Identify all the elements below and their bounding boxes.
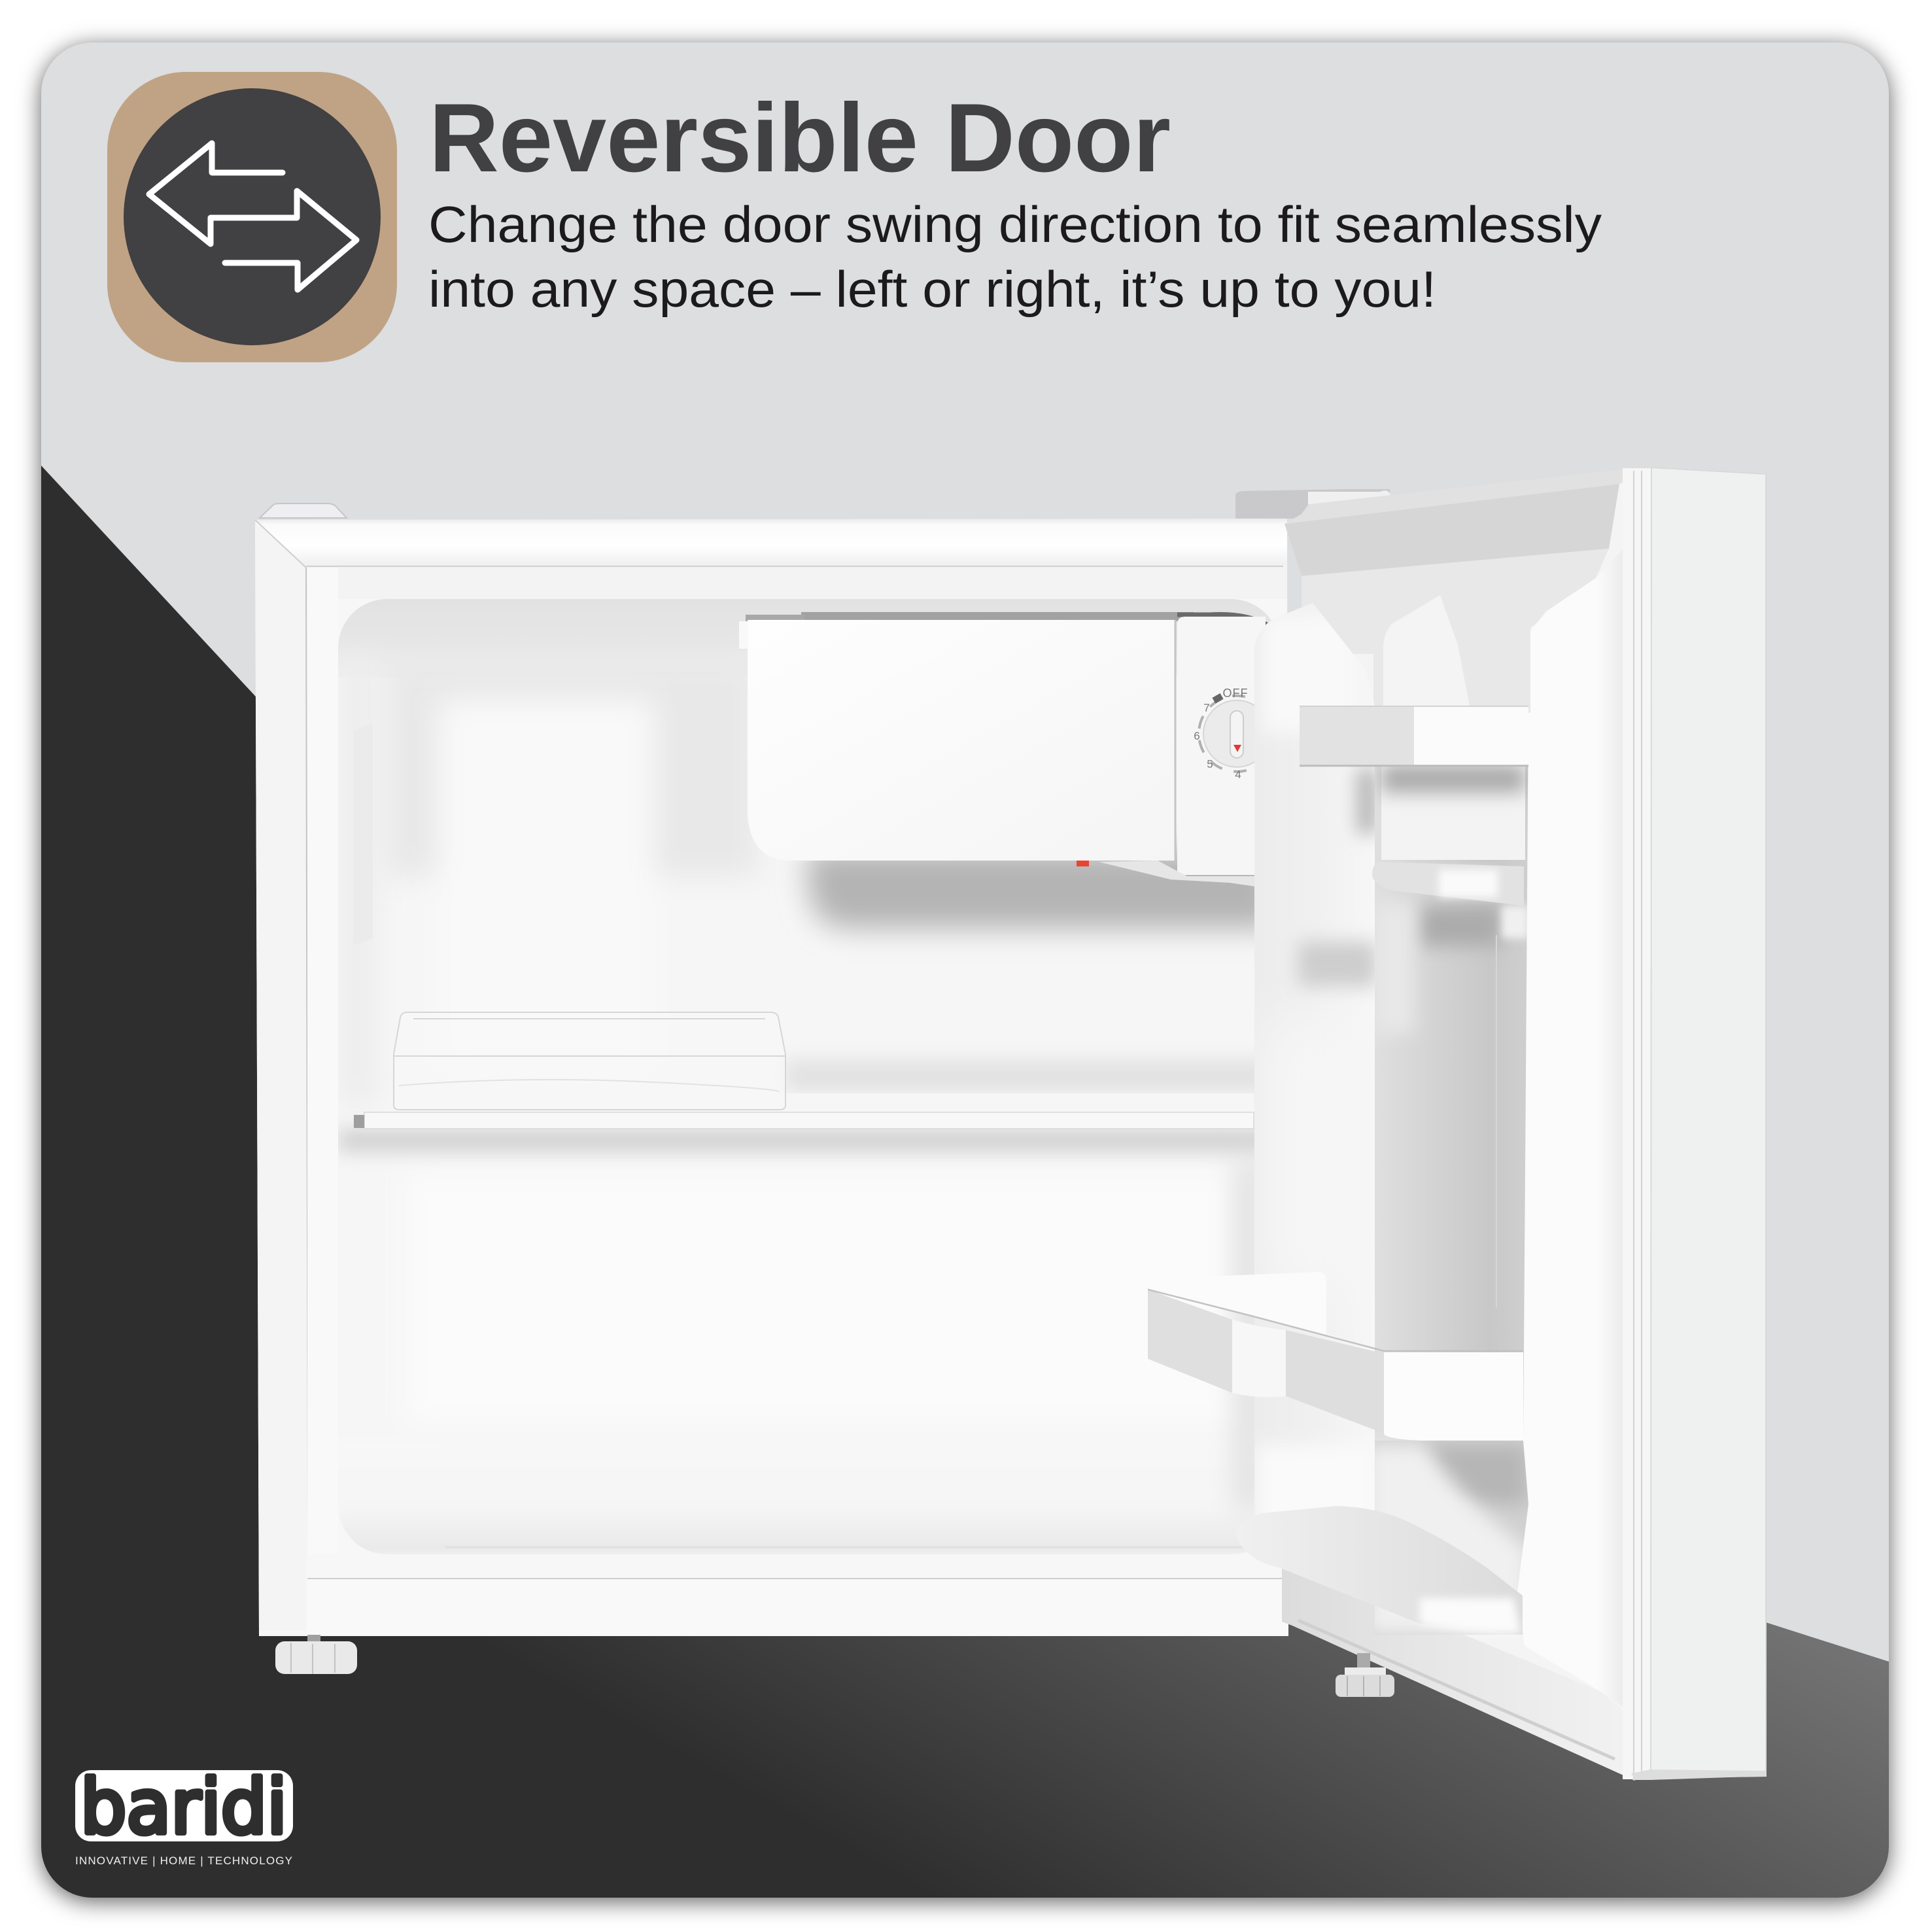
freezer shadow bbox=[808, 850, 1275, 929]
logo tagline: INNOVATIVE | HOME | TECHNOLOGY bbox=[75, 1854, 292, 1867]
door side shadow bbox=[1236, 1157, 1262, 1511]
wall label sticker bbox=[353, 723, 373, 945]
shelf shadow bbox=[338, 1129, 1280, 1152]
rear wall shading bbox=[338, 654, 1280, 1554]
recess seam bbox=[1496, 935, 1497, 1308]
control box bbox=[1099, 617, 1275, 889]
rear shelf lip bbox=[785, 1093, 1254, 1112]
door underside gasket bbox=[1282, 1568, 1635, 1781]
recess shadows bbox=[1367, 762, 1528, 1637]
left frame strip bbox=[255, 520, 338, 1630]
top frame band bbox=[255, 519, 1287, 599]
thermostat dial: OFF bbox=[1223, 687, 1248, 700]
door liner base bbox=[1254, 471, 1634, 1781]
fridge body bbox=[255, 489, 1392, 1636]
recess body bbox=[1375, 765, 1528, 1635]
freezer hinge bracket bbox=[746, 615, 804, 624]
indicator light bbox=[1077, 861, 1089, 866]
thermostat dial: 4 bbox=[1235, 768, 1241, 781]
title: Reversible Door bbox=[429, 83, 1171, 192]
middle lip bbox=[1372, 862, 1524, 906]
cavity ceiling bbox=[338, 599, 1271, 670]
door inner top wedge bbox=[1285, 484, 1619, 576]
fridge foot left bbox=[275, 1635, 357, 1674]
lower bottom sill bbox=[1235, 1506, 1523, 1633]
top right hinge bbox=[1235, 489, 1392, 519]
cabinet front bbox=[255, 519, 1288, 1636]
top left cap bbox=[260, 504, 347, 518]
open door bbox=[1148, 468, 1766, 1781]
shelf with tray bbox=[354, 1012, 1254, 1129]
text block: description: into any space – left or right, it’s up to you! bbox=[428, 260, 1436, 318]
freezer compartment door bbox=[739, 620, 1175, 866]
door gasket seal bbox=[1623, 468, 1651, 1780]
freezer wire bbox=[801, 612, 1279, 633]
logo: baridi: baridi bbox=[80, 1764, 287, 1851]
door bottom cap bbox=[1631, 1769, 1766, 1780]
clear tray bbox=[394, 1012, 785, 1110]
upper door shelf bbox=[1300, 706, 1528, 766]
text block: description: Change the door swing direction to fit seamlessly bbox=[428, 196, 1602, 253]
panel: dark wall wedge and floor bbox=[41, 466, 1889, 1898]
door outer panel bbox=[1651, 468, 1766, 1778]
fridge foot right bbox=[1336, 1653, 1394, 1697]
lower gasket strip bbox=[1298, 1620, 1615, 1759]
upper bottle bump bbox=[1383, 595, 1471, 713]
thermostat dial: 6 bbox=[1194, 730, 1200, 742]
icon: left and right arrows bbox=[149, 143, 356, 290]
thermostat dial bbox=[1194, 687, 1275, 781]
thermostat dial: 5 bbox=[1207, 758, 1213, 770]
door top edge bbox=[1285, 468, 1635, 524]
door recess top bbox=[1302, 549, 1609, 785]
door right pillar bbox=[1517, 549, 1623, 1707]
icon: reversible door arrows badge bbox=[107, 72, 397, 362]
text block: description bbox=[428, 196, 1602, 318]
thermostat dial: 7 bbox=[1203, 702, 1210, 714]
bottom frame strip bbox=[307, 1554, 1288, 1636]
wire shelf bbox=[364, 1112, 1254, 1129]
fridge interior cavity bbox=[338, 599, 1280, 1554]
lower door shelf bbox=[1148, 1272, 1523, 1441]
door left pillar bbox=[1254, 603, 1375, 1424]
